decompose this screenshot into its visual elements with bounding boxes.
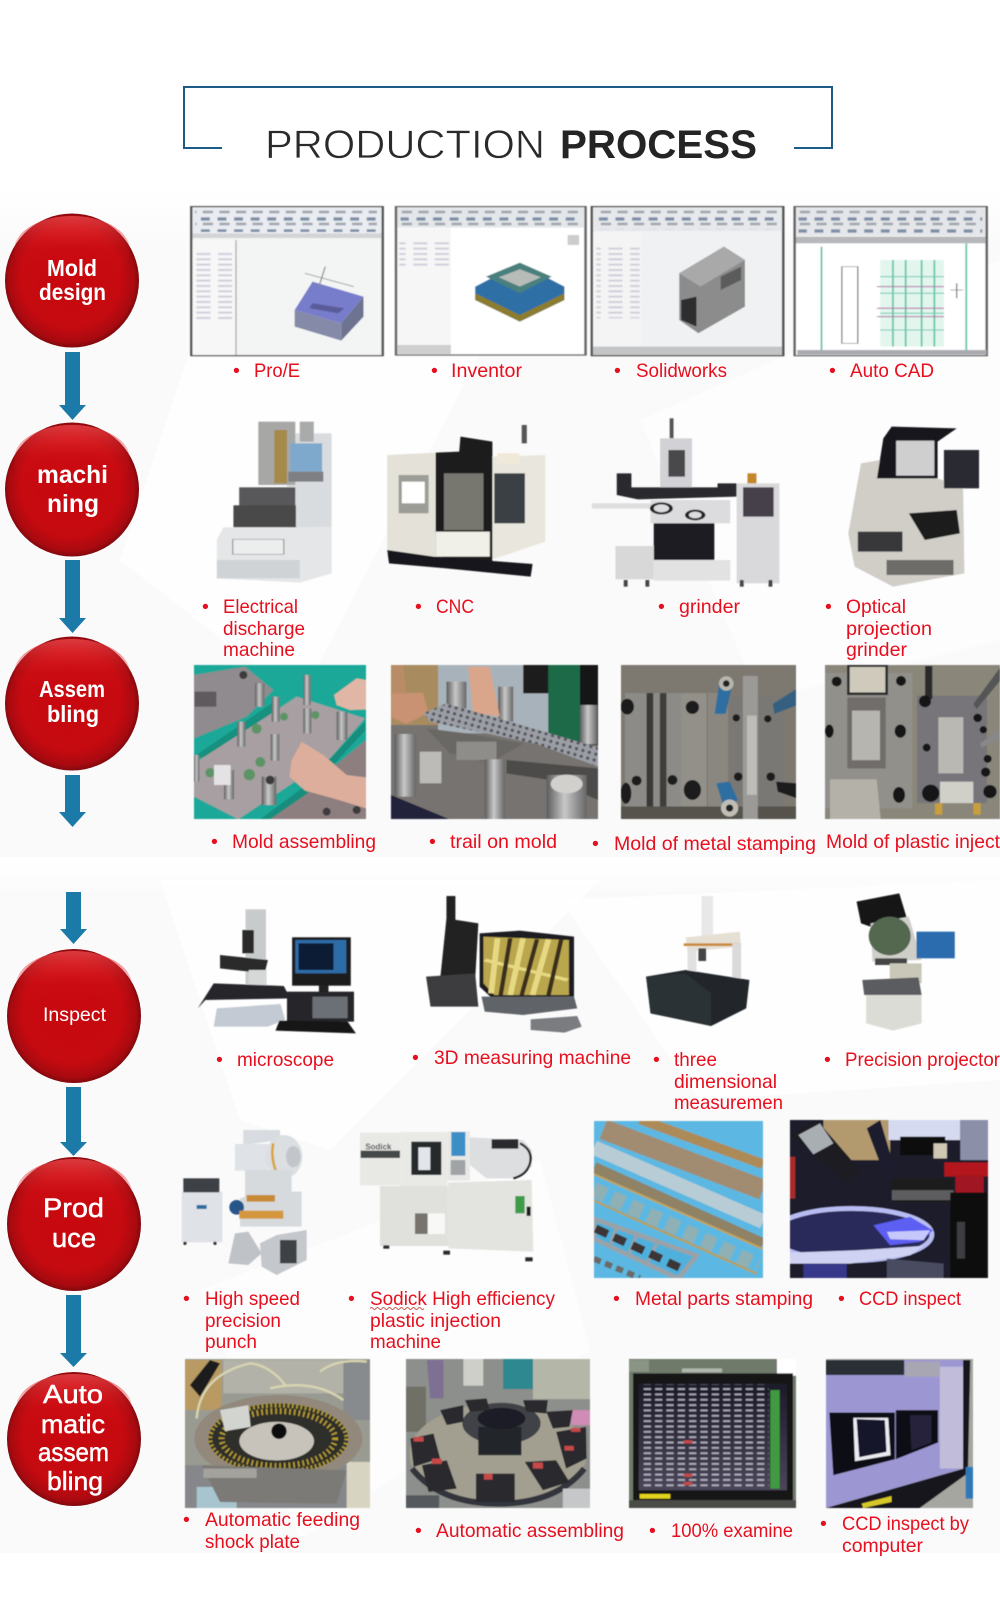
label: Auto CAD: Auto CAD (850, 360, 934, 382)
label: Inventor: • (431, 360, 438, 382)
label: Solidworks: • (614, 360, 621, 382)
machine: optical projection grinder (848, 427, 979, 587)
step: mold design: design (39, 279, 106, 305)
screenshot: Auto CAD (795, 207, 987, 356)
machine: precision projector (857, 893, 955, 1031)
machine: high speed punch (182, 1130, 307, 1275)
label: Inventor: Inventor (451, 360, 523, 382)
step: mold design (5, 214, 139, 348)
label: 100% examine: • (649, 1520, 656, 1542)
label: Metal parts stamping: Metal parts stamping (635, 1288, 813, 1310)
step: machining: machi (37, 461, 108, 489)
machine: 3D measuring machine (426, 896, 582, 1033)
label: Optical projection grinder: • (825, 596, 832, 618)
machine: Sodick injection machine: Sodick (365, 1142, 392, 1151)
label: Automatic assembling: • (415, 1520, 422, 1542)
label: Optical projection grinder (825, 596, 932, 661)
title bracket (184, 87, 832, 148)
step: assembling: Assem (39, 676, 105, 702)
row 2: machining equipment (217, 418, 979, 587)
label: Automatic assembling: Automatic assembling (436, 1520, 624, 1542)
photo: mold assembling (193, 664, 367, 820)
label: High speed precision punch (183, 1288, 300, 1353)
step: automatic assembling: assem (38, 1437, 109, 1467)
screenshot: Pro/E (191, 207, 383, 356)
step: assembling: bling (47, 701, 99, 727)
label: High speed precision punch: precision (205, 1310, 281, 1332)
title text: PRODUCTION (265, 123, 545, 167)
label: Mold of metal stamping: • (592, 833, 599, 855)
label: Automatic feeding shock plate (183, 1509, 360, 1553)
photo: mold of plastic injection (824, 664, 1000, 820)
label: High speed precision punch: • (183, 1288, 190, 1310)
row 6: automatic assembling photos (185, 1359, 973, 1508)
label: Mold of plastic inject: Mold of plastic inject (826, 831, 1000, 853)
label: microscope: • (216, 1049, 223, 1071)
photo: trail on mold (390, 664, 599, 820)
arrow 5 (60, 1087, 87, 1156)
screenshot: Inventor (396, 207, 586, 355)
label: Pro/E: • (233, 360, 240, 382)
label: Mold assembling: • (211, 831, 218, 853)
label: Mold assembling: Mold assembling (232, 831, 376, 853)
label: Sodick high efficiency plastic injection machine: Sodick High efficiency (370, 1288, 555, 1310)
label: Precision projector: • (824, 1049, 831, 1071)
step: produce: uce (52, 1223, 96, 1253)
step: automatic assembling (7, 1372, 141, 1506)
label: three dimensional measurement: • (653, 1049, 660, 1071)
step: machining (5, 422, 139, 556)
step: assembling (5, 636, 139, 770)
screenshot: Solidworks (592, 207, 783, 356)
arrow 4 (60, 892, 87, 944)
label: Optical projection grinder: grinder (846, 639, 908, 661)
label: CCD inspect by computer: • (820, 1513, 827, 1535)
step: produce: Prod (43, 1193, 104, 1223)
row 5 labels (183, 1288, 962, 1353)
label: grinder: grinder (679, 596, 741, 618)
label: three dimensional measurement: measuremen (674, 1092, 783, 1114)
label: Electrical discharge machine: discharge (223, 618, 305, 640)
row 1 labels (233, 360, 934, 382)
label: Electrical discharge machine (202, 596, 305, 661)
arrow 6 (60, 1295, 87, 1367)
step: automatic assembling: bling (47, 1466, 103, 1496)
photo: mold of metal stamping (620, 664, 797, 820)
step: produce (7, 1157, 141, 1291)
label: Mold of metal stamping: Mold of metal stamping (614, 833, 816, 855)
title text: PROCESS (560, 123, 757, 167)
label: Metal parts stamping: • (613, 1288, 620, 1310)
row 1: design software screenshots (191, 207, 987, 356)
label: CCD inspect: • (838, 1288, 845, 1310)
row 4 labels (216, 1047, 1000, 1114)
machine: microscope (198, 909, 356, 1033)
label: CCD inspect by computer (820, 1513, 969, 1557)
label: Automatic feeding shock plate: Automatic feeding (205, 1509, 360, 1531)
step: inspect (7, 949, 141, 1083)
machine: Sodick injection machine (360, 1131, 533, 1261)
label: Automatic feeding shock plate: shock plate (205, 1531, 300, 1553)
label: 3D measuring machine: 3D measuring machine (434, 1047, 631, 1069)
label: Sodick high efficiency plastic injection machine: • (348, 1288, 355, 1310)
label: CNC: • (415, 596, 422, 618)
arrow 2 (59, 560, 86, 633)
arrow 3 (59, 775, 86, 827)
step: automatic assembling: Auto (43, 1379, 103, 1409)
row 6 labels (183, 1509, 969, 1557)
label: Sodick high efficiency plastic injection machine (348, 1288, 555, 1353)
step: mold design: Mold (47, 255, 97, 281)
arrow 1 (59, 352, 86, 420)
photo: CCD inspect (789, 1119, 989, 1279)
label: Sodick high efficiency plastic injection machine: machine (370, 1331, 441, 1353)
machine: EDM (217, 422, 332, 583)
photo: CCD inspect by computer (825, 1358, 974, 1509)
label: High speed precision punch: punch (205, 1331, 257, 1353)
title (184, 87, 832, 167)
row 3: assembling photos (194, 665, 1000, 819)
label: CNC: CNC (436, 596, 474, 618)
label: Electrical discharge machine: Electrical (223, 596, 298, 618)
label: three dimensional measurement (653, 1049, 783, 1114)
step: inspect: Inspect (43, 1004, 107, 1026)
label: CCD inspect by computer: CCD inspect by (842, 1513, 969, 1535)
label: High speed precision punch: High speed (205, 1288, 300, 1310)
label: Electrical discharge machine: machine (223, 639, 295, 661)
row 5: production equipment (182, 1119, 988, 1279)
label: grinder: • (658, 596, 665, 618)
label: three dimensional measurement: dimensional (674, 1071, 777, 1093)
label: trail on mold: • (429, 831, 436, 853)
photo: 100% examine monitor (628, 1358, 797, 1509)
machine: three dimensional measurement (646, 896, 749, 1026)
label: CCD inspect by computer: computer (842, 1535, 923, 1557)
label: Solidworks: Solidworks (636, 360, 727, 382)
photo: automatic assembling (405, 1358, 591, 1509)
machine: CNC (387, 425, 545, 577)
label: Pro/E: Pro/E (254, 360, 300, 382)
label: Automatic feeding shock plate: • (183, 1509, 190, 1531)
row 3 labels (211, 831, 1000, 855)
label: CCD inspect: CCD inspect (859, 1288, 962, 1310)
label: Pro/E (233, 360, 300, 382)
label: Optical projection grinder: projection (846, 618, 932, 640)
label: 3D measuring machine: • (412, 1047, 419, 1069)
label: trail on mold: trail on mold (450, 831, 557, 853)
label: Optical projection grinder: Optical (846, 596, 906, 618)
photo: automatic feeding shock plate (184, 1358, 371, 1509)
label: 100% examine: 100% examine (671, 1520, 793, 1542)
row 4: inspection equipment (198, 893, 955, 1033)
step: automatic assembling: matic (41, 1409, 105, 1439)
step: machining: ning (47, 490, 99, 518)
photo: metal parts stamping (593, 1120, 764, 1279)
machine: grinder (592, 418, 779, 587)
label: microscope: microscope (237, 1049, 334, 1071)
label: CNC (415, 596, 474, 618)
label: Auto CAD: • (829, 360, 836, 382)
label: Sodick high efficiency plastic injection machine: plastic injection (370, 1310, 501, 1332)
label: three dimensional measurement: three (674, 1049, 717, 1071)
label: Electrical discharge machine: • (202, 596, 209, 618)
row 2 labels (202, 596, 932, 661)
